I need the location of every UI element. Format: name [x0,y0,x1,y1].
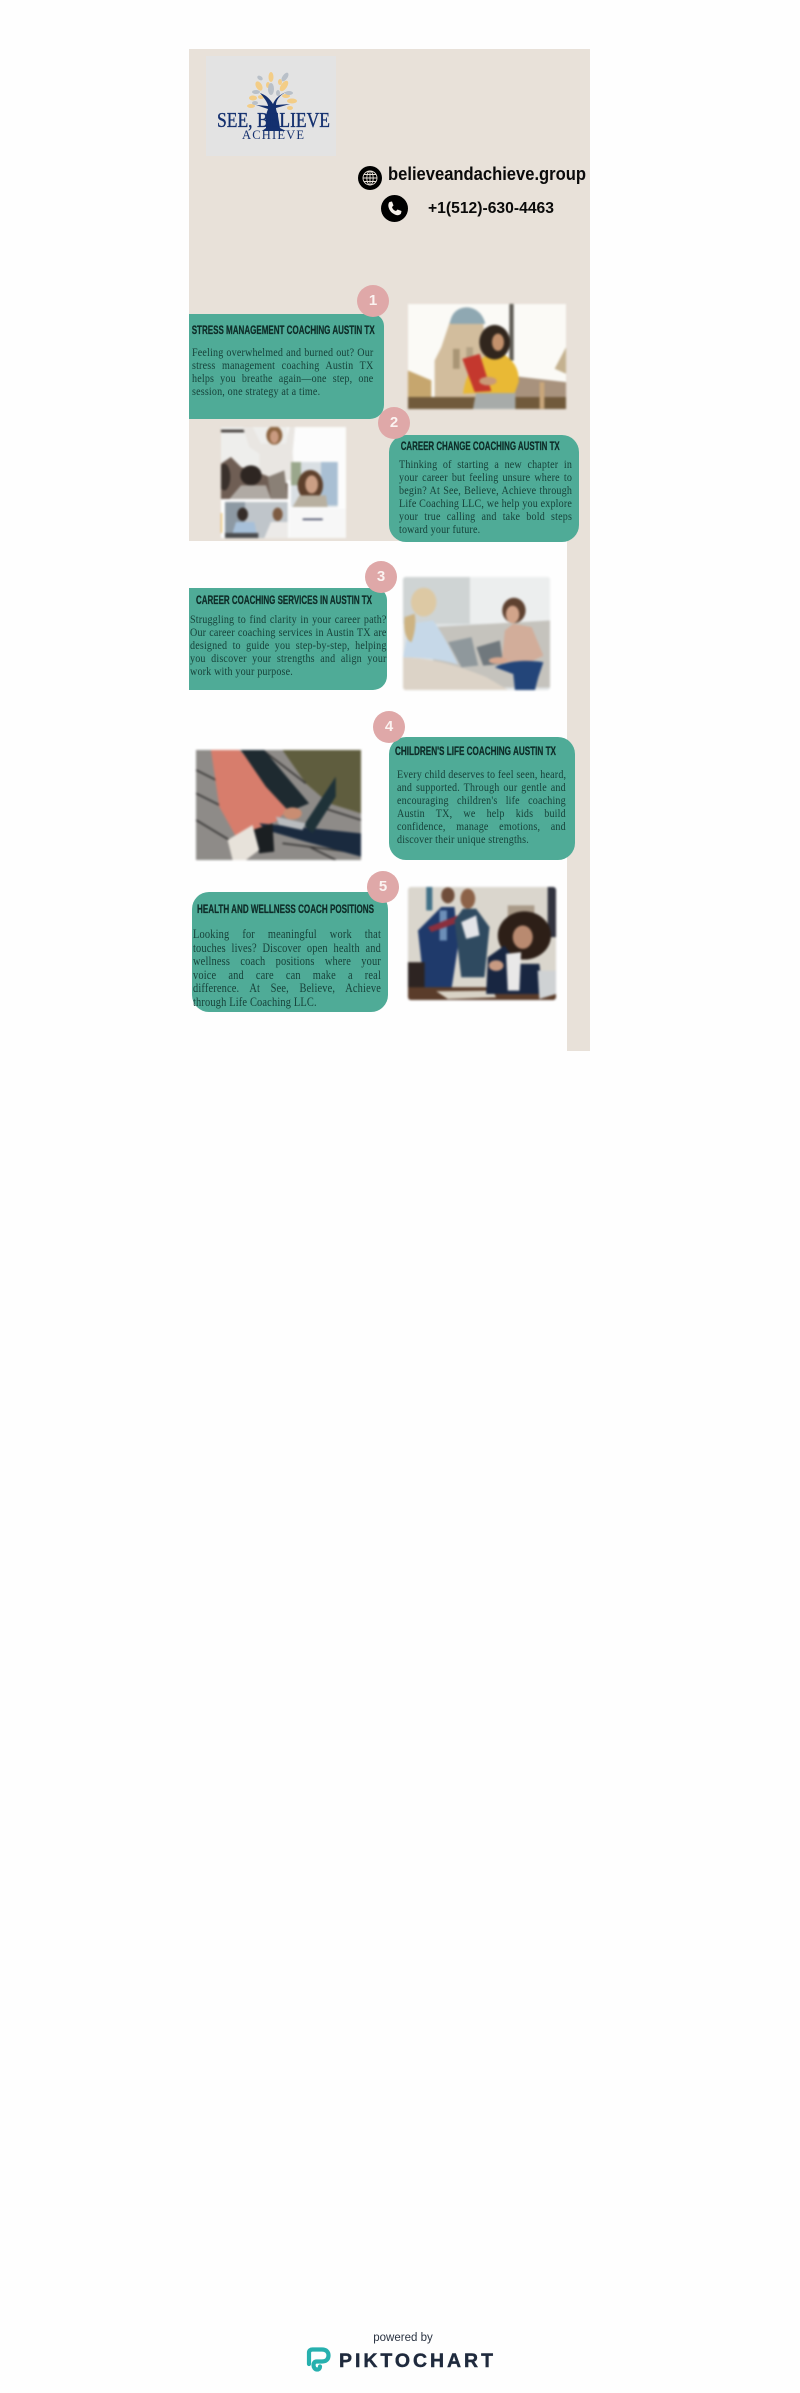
body text 5: voice and care can make a real [193,967,381,982]
body text 4: and supported. Through our gentle and [397,780,566,794]
body text 2: your career but feeling unsure where to [399,470,572,484]
badge 5: 5 [379,878,387,895]
badge 3 [365,561,397,593]
badge 1: 1 [369,292,377,309]
background panel top [189,49,590,541]
body text 4: discover their unique strengths. [397,832,529,846]
photo: woman with red folder [406,302,568,411]
body text 4: encouraging children's life coaching [397,793,566,807]
body text 4 [397,767,566,846]
heading 3: CAREER COACHING SERVICES IN AUSTIN TX [196,595,372,607]
body text 3: work with your purpose. [190,664,293,678]
body text 3 [190,612,387,678]
footer: powered by: powered by [373,2332,433,2344]
body text 5 [193,926,381,1009]
logo subtitle: ACHIEVE [242,128,304,142]
badge 2 [378,407,410,439]
badge 4 [373,711,405,743]
body text 1: helps you breathe again—one step, one [192,371,373,385]
icon: piktochart mark [309,2350,328,2370]
background strip right [567,541,590,1051]
body text 2: your true calling and take bold steps [399,509,572,523]
panel: card 5 health and wellness [192,892,388,1012]
phone text: +1(512)-630-4463 [428,200,554,217]
panel: card 3 career coaching [189,588,387,690]
body text 4: Every child deserves to feel seen, heard, [397,767,566,781]
body text 5: touches lives? Discover open health and [193,940,381,955]
panel: card 4 children's life coaching [389,737,575,860]
icon: phone [381,195,408,222]
body text 3: Our career coaching services in Austin TX are [190,625,387,639]
body text 3: designed to guide you step-by-step, helping [190,638,387,652]
body text 4: confidence, manage emotions, and [397,819,566,833]
body text 1: Feeling overwhelmed and burned out? Our [192,345,373,359]
body text 3: Struggling to find clarity in your career path? [190,612,387,626]
body text 5: difference. At See, Believe, Achieve [193,980,381,995]
badge 4: 4 [385,718,393,735]
body text 1 [192,345,374,398]
badge 3: 3 [377,568,385,585]
website text: believeandachieve.group [388,163,586,184]
body text 2: begin? At See, Believe, Achieve through [399,483,572,497]
body text 5: through Life Coaching LLC. [193,994,317,1009]
badge 1 [357,285,389,317]
wordmark: PIKTOCHART [339,2350,493,2372]
heading 5: HEALTH AND WELLNESS COACH POSITIONS [197,904,374,916]
photo: two women on sofa [402,576,551,692]
body text 2: toward your future. [399,522,480,536]
footer: piktochart logo [306,2347,494,2372]
body text 2 [399,457,572,536]
body text 2: Life Coaching LLC, we help you explore [399,496,572,510]
badge 2: 2 [390,414,398,431]
photo: coaching collage [219,425,346,540]
logo [206,56,336,156]
panel: card 2 career change [389,435,579,542]
photo: woman with laptop on bench [194,748,363,862]
body text 3: you discover your strengths and align your [190,651,387,665]
body text 1: stress management coaching Austin TX [192,358,373,372]
body text 1: session, one strategy at a time. [192,384,320,398]
panel: card 1 stress management [189,314,384,419]
body text 2: Thinking of starting a new chapter in [399,457,572,471]
heading 4: CHILDREN'S LIFE COACHING AUSTIN TX [395,746,556,758]
icon: globe [358,166,382,190]
body text 5: wellness coach positions where your [193,953,381,968]
badge 5 [367,871,399,903]
heading 2: CAREER CHANGE COACHING AUSTIN TX [401,441,560,453]
body text 4: Austin TX, we help kids build [397,806,566,820]
photo: stressed woman at desk [406,885,558,1002]
heading 1: STRESS MANAGEMENT COACHING AUSTIN TX [192,325,375,337]
body text 5: Looking for meaningful work that [193,926,381,941]
